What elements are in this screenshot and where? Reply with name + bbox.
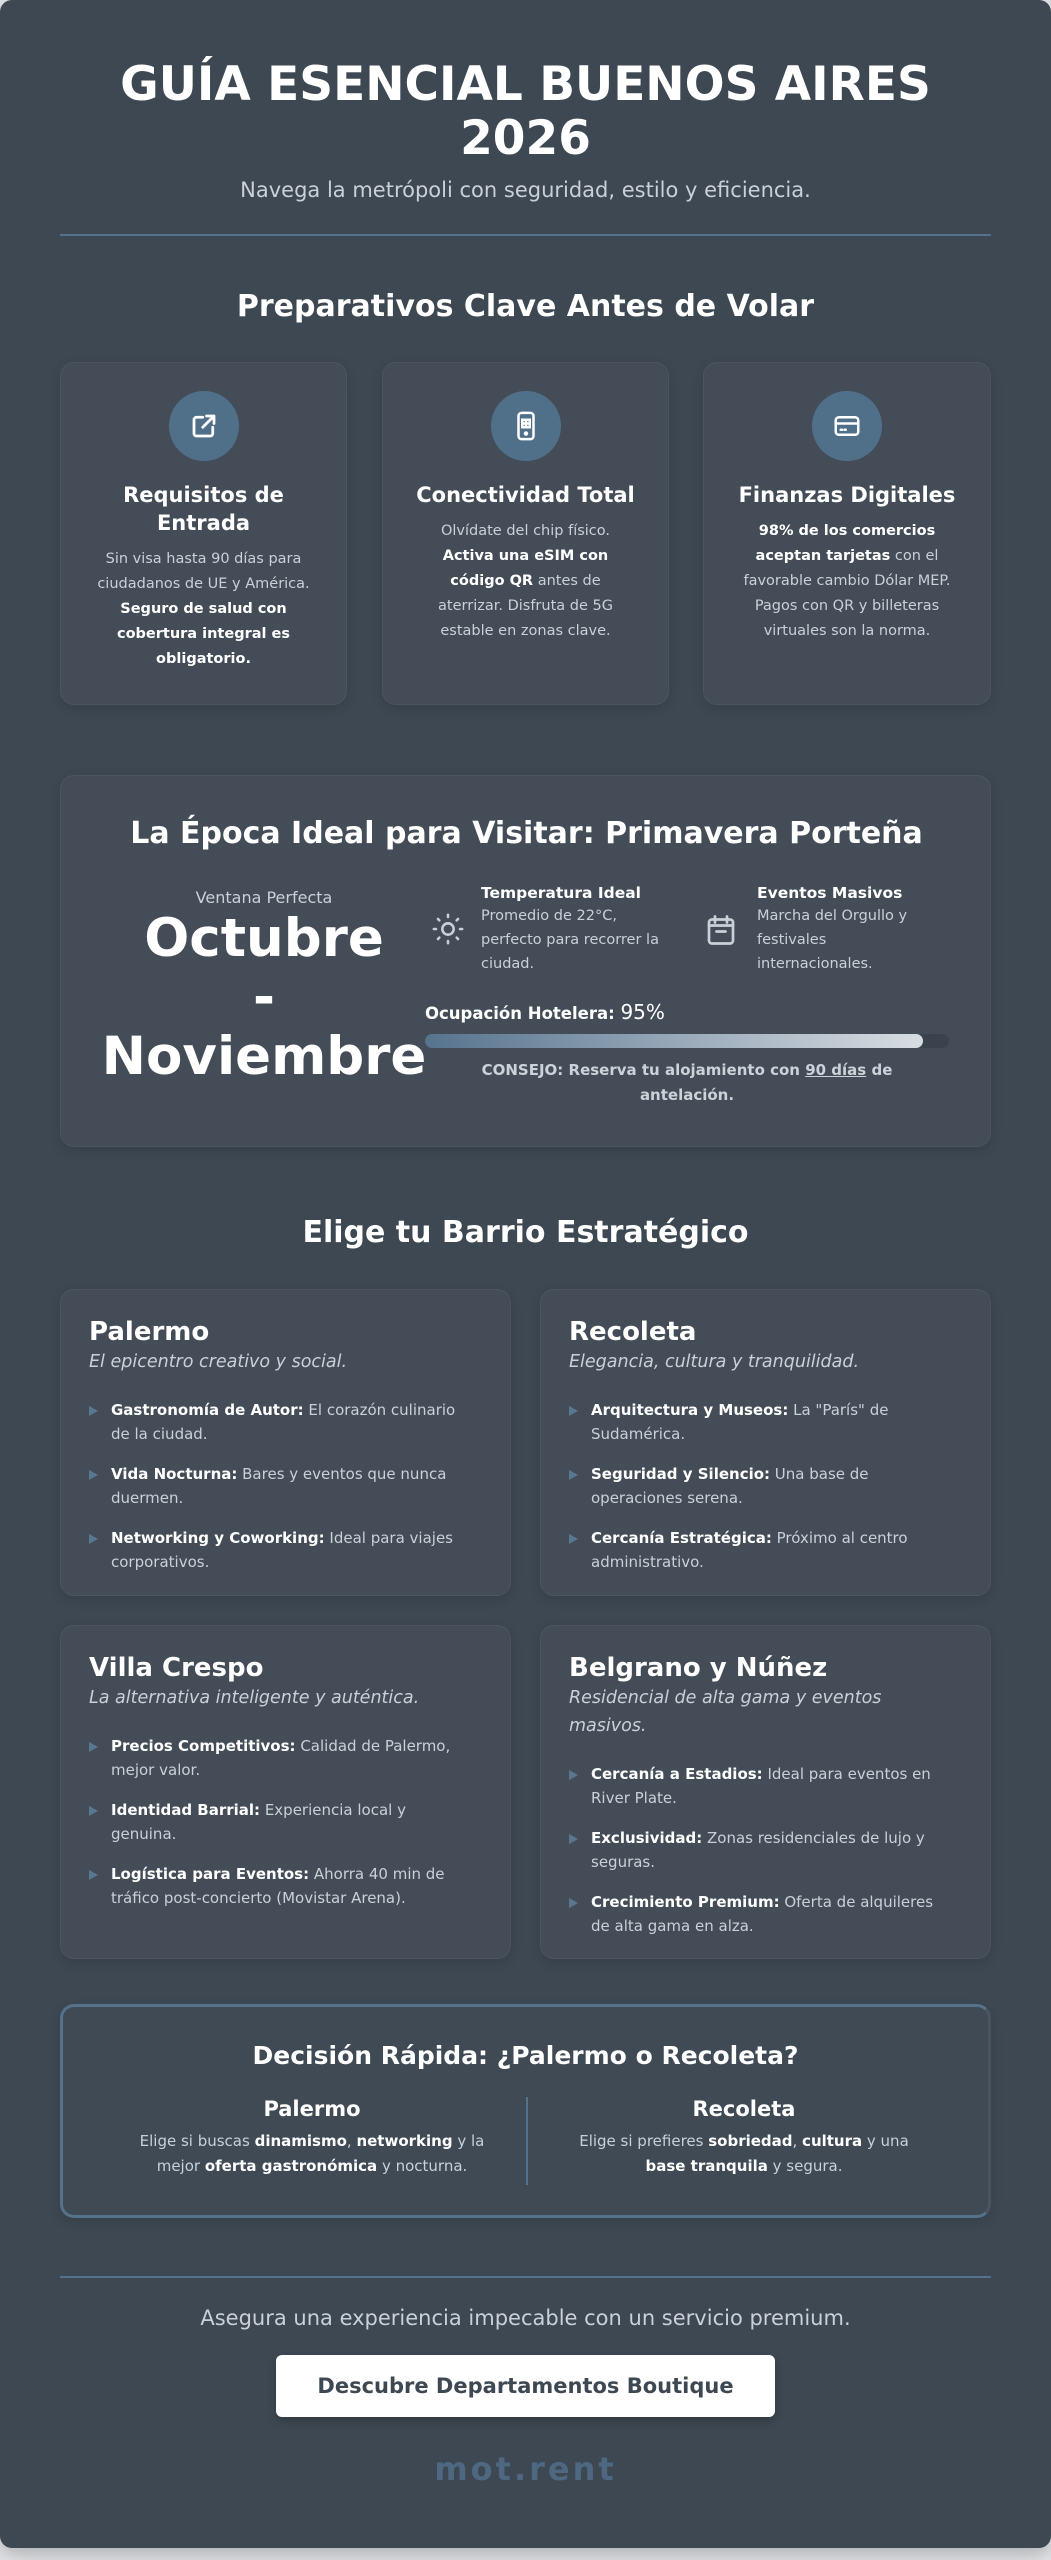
column: palermo xyxy=(140,2097,484,2175)
column: recoleta: Recoleta xyxy=(693,2097,795,2121)
heading: barrio: Elige tu Barrio Estratégico xyxy=(302,1215,749,1250)
panel: villa crespo xyxy=(60,1625,511,1959)
heading: La Época Ideal para Visitar: Primavera Porteña xyxy=(130,816,923,851)
panel: epoca ideal xyxy=(60,775,991,1147)
panel: requisitos: Entrada xyxy=(157,511,250,535)
column: recoleta xyxy=(579,2097,909,2175)
panel: requisitos: Requisitos de xyxy=(123,483,284,507)
cta text: Asegura una experiencia impecable con un servicio premium. xyxy=(200,2306,851,2330)
panel: villa crespo: Logística para Eventos: Ahorra 40 min de tráfico post-concierto (Movistar Arena). xyxy=(111,1865,445,1907)
panel: finanzas: 98% de los comercios aceptan tarjetas con el favorable cambio Dólar MEP. Pagos con QR y billeteras virtuales son la norma. xyxy=(743,523,951,639)
column: palermo: Elige si buscas dinamismo, networking y la mejor oferta gastronómica y nocturna. xyxy=(140,2132,484,2175)
title: 2026 xyxy=(460,111,591,166)
title: GUÍA ESENCIAL BUENOS AIRES xyxy=(120,57,931,112)
panel: palermo xyxy=(60,1289,511,1596)
panel: belgrano: Crecimiento Premium: Oferta de alquileres de alta gama en alza. xyxy=(591,1893,933,1935)
panel: belgrano: Exclusividad: Zonas residenciales de lujo y seguras. xyxy=(591,1829,925,1871)
panel: decision rapida: Decisión Rápida: ¿Palermo o Recoleta? xyxy=(252,2041,798,2070)
panel: conectividad: Conectividad Total xyxy=(416,483,635,507)
panel: conectividad: Olvídate del chip físico. Activa una eSIM con código QR antes de aterrizar. Disfruta de 5G estable en zonas clave. xyxy=(438,523,613,639)
button: Descubre Departamentos Boutique xyxy=(317,2374,734,2398)
date window xyxy=(102,888,426,1087)
panel: palermo: El epicentro creativo y social. xyxy=(89,1352,347,1372)
panel: recoleta: Seguridad y Silencio: Una base de operaciones serena. xyxy=(591,1465,869,1507)
panel: palermo: Networking y Coworking: Ideal para viajes corporativos. xyxy=(111,1529,453,1571)
icon: sun xyxy=(432,914,464,944)
eventos: Eventos Masivos xyxy=(757,884,902,902)
date window: - xyxy=(253,967,275,1028)
panel: recoleta xyxy=(540,1289,991,1596)
panel: belgrano: Residencial de alta gama y eventos masivos. xyxy=(569,1688,881,1736)
date window: Ventana Perfecta xyxy=(196,888,332,907)
button xyxy=(276,2355,775,2417)
temp xyxy=(432,884,659,972)
panel: belgrano: Belgrano y Núñez xyxy=(569,1653,827,1683)
panel: recoleta: Arquitectura y Museos: La "París" de Sudamérica. xyxy=(591,1401,888,1443)
date window: Octubre xyxy=(144,908,384,969)
bar chart: ocupacion: CONSEJO: Reserva tu alojamiento con 90 días de antelación. xyxy=(482,1061,892,1104)
panel: belgrano: Cercanía a Estadios: Ideal para eventos en River Plate. xyxy=(591,1765,931,1807)
icon: card xyxy=(812,391,882,461)
icon: phone xyxy=(490,391,560,461)
panel: recoleta: Cercanía Estratégica: Próximo al centro administrativo. xyxy=(591,1529,908,1571)
date window: Noviembre xyxy=(102,1026,426,1087)
icon: calendar xyxy=(708,915,734,945)
title xyxy=(120,56,931,166)
panel: palermo: Gastronomía de Autor: El corazón culinario de la ciudad. xyxy=(111,1401,455,1443)
panel: finanzas xyxy=(703,362,991,705)
column: palermo: Palermo xyxy=(263,2097,361,2121)
column: recoleta: Elige si prefieres sobriedad, cultura y una base tranquila y segura. xyxy=(579,2132,909,2175)
panel: recoleta: Recoleta xyxy=(569,1317,696,1347)
panel: recoleta: Elegancia, cultura y tranquilidad. xyxy=(569,1352,859,1372)
panel: conectividad xyxy=(382,362,669,705)
icon: external link xyxy=(168,391,238,461)
panel: villa crespo: La alternativa inteligente y auténtica. xyxy=(89,1688,419,1708)
panel: requisitos: Sin visa hasta 90 días para ciudadanos de UE y América. Seguro de salud con cobertura integral es obligatorio. xyxy=(97,551,310,667)
brand: mot.rent xyxy=(434,2450,617,2488)
temp: Promedio de 22°C, perfecto para recorrer la ciudad. xyxy=(481,908,659,972)
panel: villa crespo: Villa Crespo xyxy=(89,1653,263,1683)
panel: villa crespo: Identidad Barrial: Experiencia local y genuina. xyxy=(111,1801,406,1843)
heading: preparativos: Preparativos Clave Antes de Volar xyxy=(237,289,814,324)
panel: belgrano xyxy=(540,1625,991,1959)
panel: requisitos xyxy=(60,362,347,705)
subtitle: Navega la metrópoli con seguridad, estilo y eficiencia. xyxy=(240,178,811,202)
panel: palermo: Palermo xyxy=(89,1317,209,1347)
temp: Temperatura Ideal xyxy=(481,884,641,902)
panel: villa crespo: Precios Competitivos: Calidad de Palermo, mejor valor. xyxy=(111,1737,450,1779)
bar chart: ocupacion: Ocupación Hotelera: 95% xyxy=(425,1000,665,1024)
bar chart: ocupacion xyxy=(425,1000,949,1104)
panel: palermo: Vida Nocturna: Bares y eventos que nunca duermen. xyxy=(111,1465,446,1507)
eventos: Marcha del Orgullo y festivales internacionales. xyxy=(757,908,907,972)
eventos xyxy=(708,884,907,972)
panel: finanzas: Finanzas Digitales xyxy=(739,483,955,507)
panel: decision rapida xyxy=(60,2004,991,2218)
